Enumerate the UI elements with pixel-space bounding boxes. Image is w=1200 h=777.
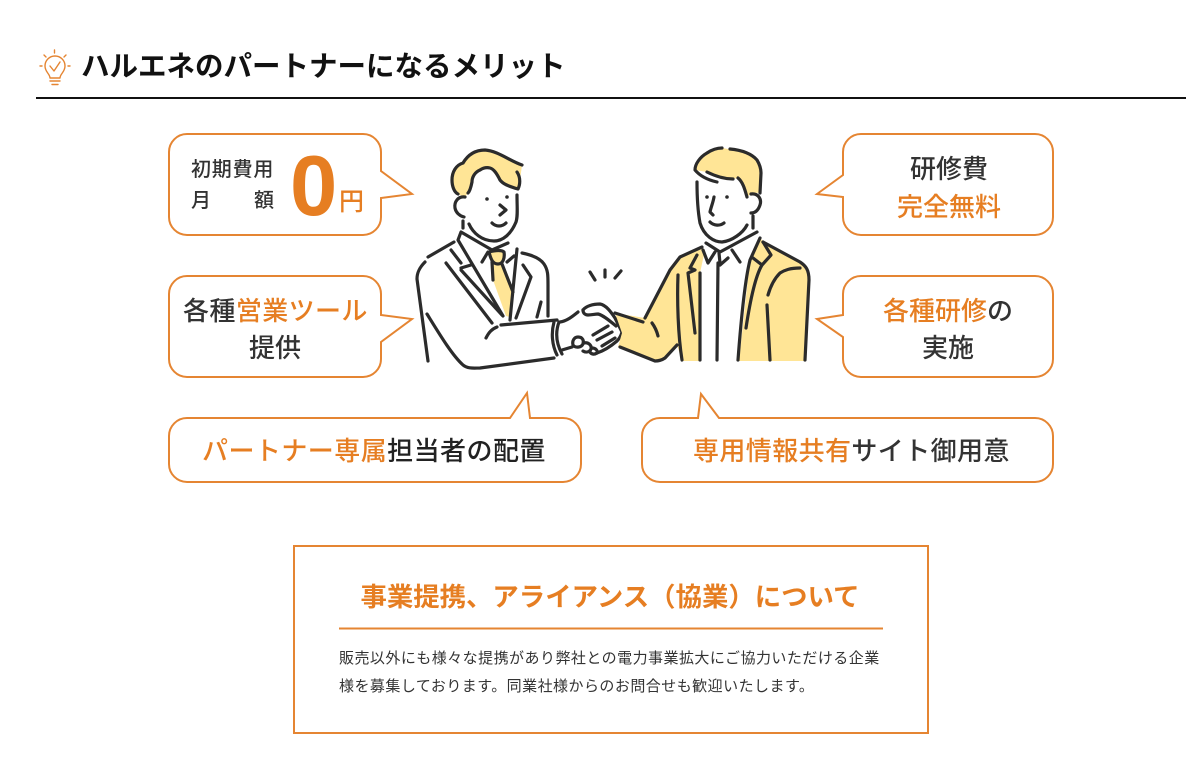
title rule — [36, 97, 1186, 99]
illustration: left businessman — [417, 150, 578, 368]
title: ハルエネのパートナーになるメリット — [81, 51, 566, 83]
callout: various training: 各種研修の — [883, 296, 1013, 326]
callout: training fee free: 完全無料 — [897, 192, 1001, 222]
callout: various training — [817, 276, 1053, 377]
hair fill — [695, 148, 761, 197]
panel: business alliance — [294, 546, 928, 733]
jacket fill — [615, 238, 809, 361]
callout: initial cost 0 yen: 額 — [254, 189, 274, 212]
tie — [489, 250, 513, 317]
callout: sales tools: 各種営業ツール — [183, 296, 368, 326]
panel body text: 様を募集しております。同業社様からのお問合せも歓迎いたします。 — [339, 678, 814, 695]
callout: initial cost 0 yen: 初期費用 — [191, 158, 274, 181]
callout: various training: 実施 — [922, 333, 974, 363]
illustration: right businessman — [615, 148, 809, 361]
callout: initial cost 0 yen: 0 — [290, 139, 337, 234]
callout: training fee free — [817, 134, 1053, 235]
panel heading: 事業提携、アライアンス（協業）について — [360, 582, 860, 612]
callout: sales tools — [169, 276, 412, 377]
panel body text — [339, 650, 880, 695]
callout: information sharing site: 専用情報共有サイト御用意 — [693, 436, 1010, 466]
callout: sales tools: 提供 — [249, 333, 301, 363]
callout: training fee free: 研修費 — [910, 154, 988, 184]
illustration: handshake — [573, 270, 622, 354]
panel body text: 販売以外にも様々な提携があり弊社との電力事業拡大にご協力いただける企業 — [339, 650, 880, 667]
callout: initial cost 0 yen — [169, 134, 412, 235]
callout: initial cost 0 yen: 円 — [339, 188, 364, 216]
callout: dedicated partner representative — [169, 393, 581, 482]
callout: information sharing site — [642, 394, 1053, 482]
heading rule — [339, 628, 883, 630]
hair — [452, 150, 522, 197]
callout: initial cost 0 yen: 月 — [191, 190, 211, 212]
icon: light bulb — [40, 50, 70, 84]
callout: dedicated partner representative: パートナー専属担当者の配置 — [202, 436, 546, 466]
